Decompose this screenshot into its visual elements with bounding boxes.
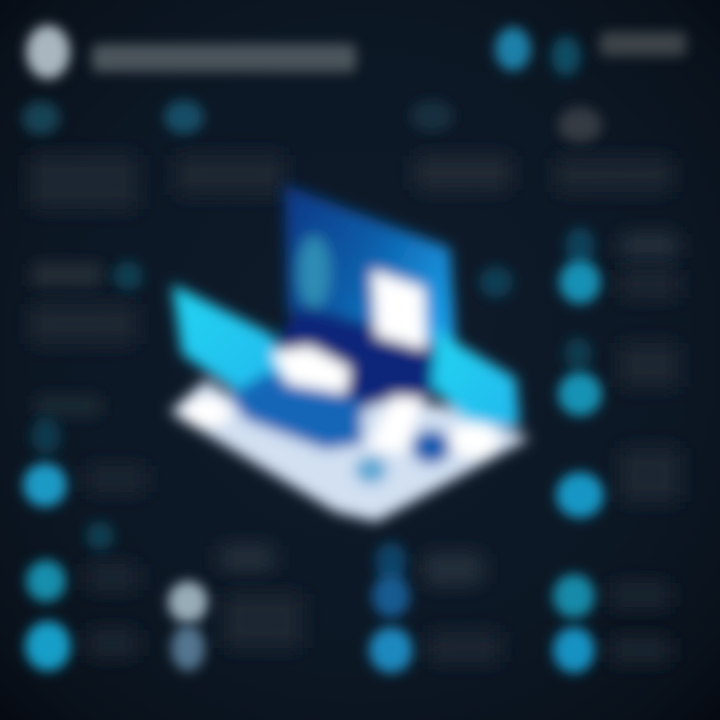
text block: [220, 546, 274, 570]
icon stem: [31, 417, 61, 455]
title: [92, 44, 356, 72]
text block 1: [620, 234, 678, 258]
panel: left middle text: [30, 261, 143, 344]
small marker beside illustration: [479, 266, 513, 298]
white card: [272, 346, 350, 394]
dark blue base: [265, 305, 445, 425]
platform highlight: right: [450, 422, 498, 458]
heading: column 4: [558, 107, 602, 143]
panel column: teal: [298, 236, 330, 308]
text block: [224, 594, 302, 648]
panel: bottom center-right items: [369, 542, 500, 673]
panel: bottom center-left items: [168, 546, 302, 671]
right cyan panel: [432, 330, 520, 428]
icon: stem 2: [564, 337, 592, 371]
icon: small marker: [86, 521, 114, 551]
text block 1: [86, 564, 138, 590]
header: [26, 25, 686, 79]
heading: column 3: [410, 100, 454, 132]
icon: cyan circle 5: [553, 627, 595, 673]
heading: [32, 264, 102, 286]
text block: [428, 632, 500, 662]
icon: teal marker: [113, 261, 143, 291]
panel: lower left item: [23, 396, 146, 507]
header label: [600, 32, 686, 56]
icon: cyan circle 1: [26, 560, 66, 602]
panel: bottom left items: [25, 521, 138, 671]
heading: column 1: [22, 101, 60, 135]
icon: cyan circle 2: [25, 621, 71, 671]
icon: header badge: [495, 27, 531, 71]
text block 2: [620, 343, 678, 387]
text block: [86, 466, 146, 492]
icon: cyan circle 2: [558, 372, 602, 416]
blue tray: [228, 372, 362, 450]
panel: top text columns: [22, 100, 672, 209]
text block: column 2: [176, 155, 284, 195]
panel column: white: [372, 270, 426, 350]
text block: [424, 554, 482, 584]
platform highlight: curve: [368, 396, 424, 454]
white platform: [170, 380, 530, 522]
text block 5: [610, 638, 670, 662]
icon: small header badge: [551, 36, 581, 76]
text block: column 1: [30, 155, 138, 209]
icon: stem 1: [565, 227, 595, 265]
icon: cyan circle 1: [559, 260, 601, 304]
icon: cyan circle: [369, 627, 413, 673]
icon: cyan circle 4: [553, 574, 595, 618]
text block: column 4: [556, 158, 672, 192]
icon: cyan circle: [23, 463, 67, 507]
text block 3: [620, 448, 680, 502]
icon: blue circle: [171, 625, 205, 671]
heading: column 2: [164, 100, 204, 134]
panel: right column items: [553, 227, 680, 673]
text block: [30, 304, 136, 344]
icon: pale circle: [168, 581, 208, 623]
text block 4: [610, 583, 670, 607]
icon: logo circle: [26, 25, 70, 79]
icon: blue stem: [375, 542, 407, 582]
icon: platform button 2: [355, 456, 387, 484]
text block 1b: [620, 270, 678, 298]
icon: blue circle: [372, 574, 410, 618]
heading: [36, 396, 100, 416]
back panel: [284, 184, 456, 378]
icon: platform button 1: [412, 430, 450, 464]
text block 2: [86, 630, 138, 656]
left cyan panel: [172, 284, 295, 402]
platform highlight: left: [183, 397, 231, 427]
text block: column 3: [416, 156, 510, 190]
central isometric illustration: [170, 184, 530, 522]
icon: cyan circle 3: [556, 472, 604, 518]
